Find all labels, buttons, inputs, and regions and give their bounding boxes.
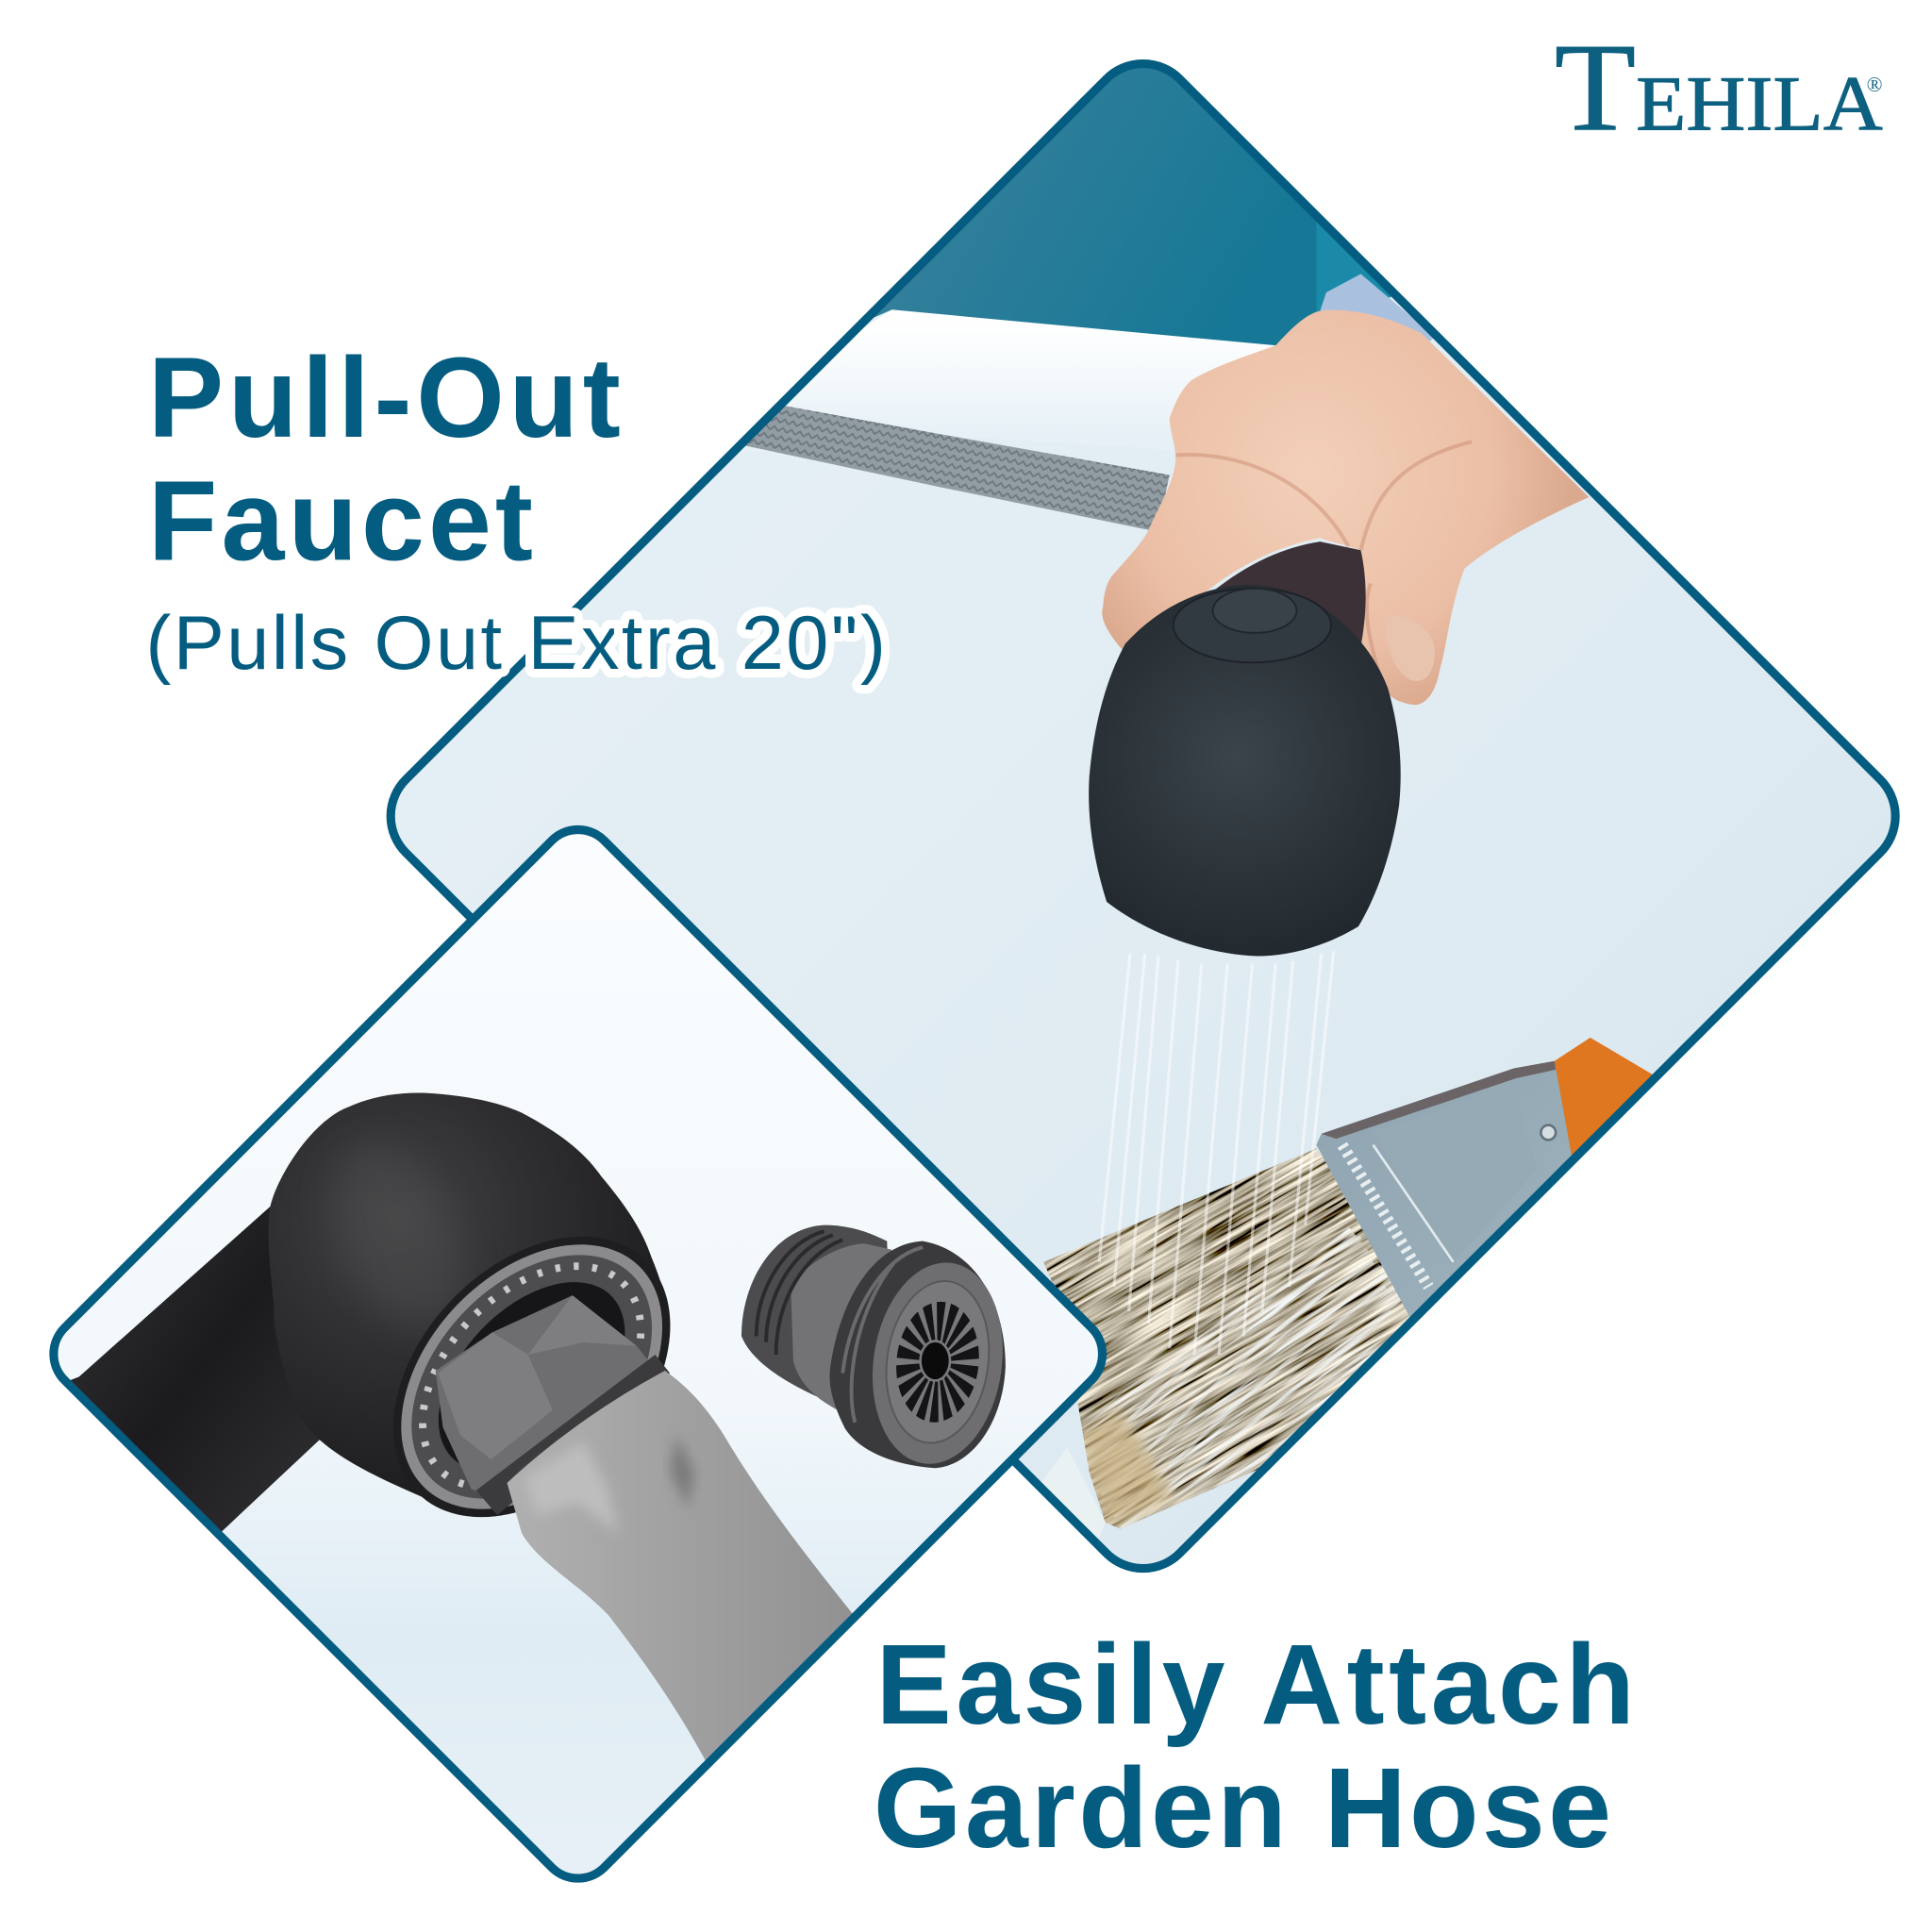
panel: garden hose attachment photo	[39, 814, 1126, 1904]
heading: Pull-Out Faucet	[148, 335, 621, 585]
aerator waist	[791, 1243, 892, 1412]
heading: Easily Attach Garden Hose: Garden Hose	[874, 1745, 1611, 1872]
nut facets	[438, 1295, 637, 1459]
water streams	[1099, 951, 1334, 1355]
hose collar	[476, 1355, 670, 1515]
heading: Easily Attach Garden Hose	[874, 1622, 1635, 1872]
teal wall	[874, 68, 1317, 345]
sleeve	[1320, 274, 1433, 341]
ferrule ridges	[1342, 1145, 1428, 1287]
panel: pull-out sprayer photo	[387, 59, 1900, 1574]
aerator back thread	[741, 1225, 892, 1412]
hand	[1102, 310, 1589, 705]
subheading: Pulls Out Extra 20: (Pulls Out Extra 20")	[145, 601, 886, 686]
sprayer head	[1089, 585, 1401, 957]
sprayer button centre	[1213, 589, 1296, 633]
big diamond frame	[369, 42, 1917, 1590]
small diamond frame	[39, 814, 1118, 1893]
ferrule top edge	[1322, 1061, 1556, 1139]
aerator ridges	[842, 1247, 923, 1423]
rivet	[1541, 1125, 1556, 1140]
heading: Easily Attach Garden Hose: Easily Attach	[876, 1622, 1635, 1748]
aerator threads	[757, 1231, 842, 1355]
hex nut	[436, 1295, 652, 1496]
faucet arm	[70, 1207, 320, 1532]
thumbnail	[1387, 623, 1435, 681]
aerator face inner rim	[876, 1274, 999, 1450]
aerator face	[860, 1254, 1015, 1473]
sprayer button	[1174, 589, 1331, 662]
brush ferrule	[1316, 1060, 1572, 1317]
tube highlight	[525, 1441, 618, 1534]
registered mark: ®	[1867, 73, 1883, 96]
tube reflection	[670, 1435, 694, 1508]
aerator front body	[829, 1241, 1006, 1468]
orange brush handle	[1555, 1038, 1657, 1163]
heading: Pull-Out Faucet: Pull-Out	[148, 335, 621, 461]
braided hose	[744, 398, 1170, 532]
sink lip	[786, 309, 1275, 418]
sprayer handle	[1215, 541, 1366, 643]
ball highlight	[362, 1171, 449, 1316]
brush bristles	[1043, 1149, 1409, 1528]
aerator centre hole	[921, 1341, 950, 1380]
ferrule panel	[1374, 1086, 1538, 1266]
faucet ball	[268, 1092, 669, 1512]
gray tube	[508, 1371, 867, 1780]
aerator ring	[393, 1237, 670, 1517]
logo: Tehila: TEHILA	[1555, 17, 1883, 157]
heading: Pull-Out Faucet: Faucet	[148, 458, 533, 585]
knuckle shadows	[1175, 441, 1472, 689]
removable aerator	[741, 1225, 1015, 1473]
brush tip shadow on sink	[1041, 1447, 1106, 1540]
teal wall right strip	[1317, 223, 1391, 311]
aerator spokes	[907, 1320, 969, 1404]
